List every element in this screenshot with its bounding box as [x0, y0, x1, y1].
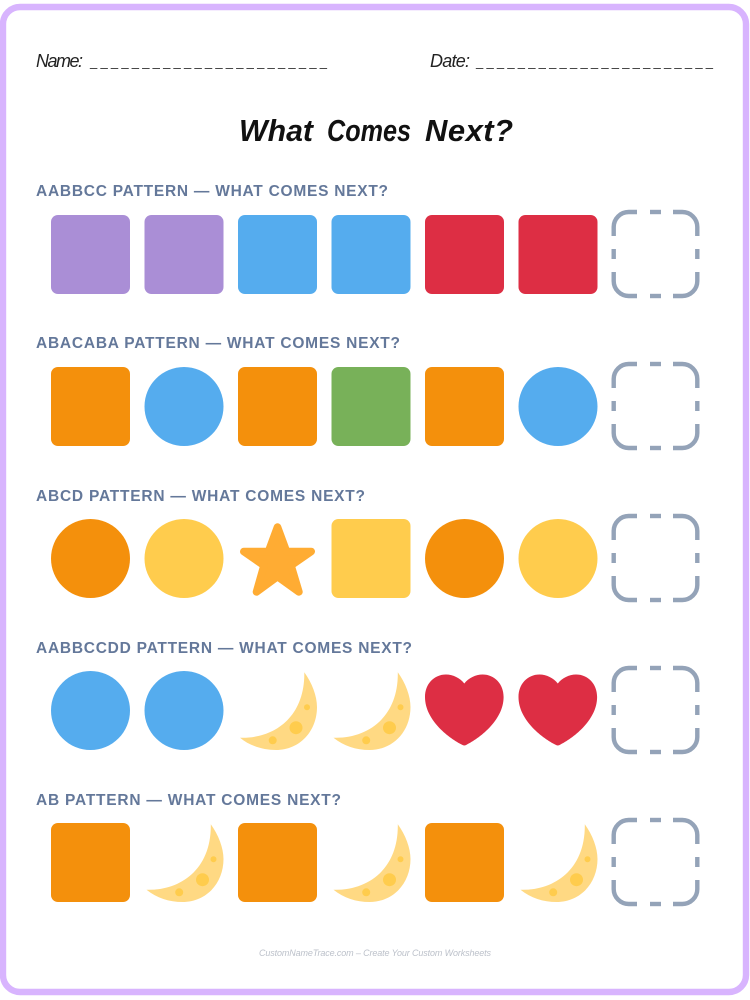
shape: crescent moon — [334, 824, 410, 902]
panel: AABBCC pattern — [36, 183, 697, 296]
title: What — [239, 113, 315, 148]
shape: blue circle — [144, 671, 224, 750]
title — [239, 113, 513, 148]
date field — [430, 51, 714, 71]
shape: orange square — [51, 367, 130, 446]
shape: blue square — [332, 215, 410, 294]
title: Comes — [327, 113, 411, 148]
answer box — [614, 364, 697, 448]
shape: orange circle — [425, 519, 504, 598]
shape: purple square — [144, 215, 224, 294]
shape: red square — [518, 215, 598, 294]
shape: blue circle — [144, 367, 224, 446]
date field: _______________________ — [475, 54, 714, 70]
panel: ABCD pattern — [36, 488, 697, 600]
shape: yellow square — [332, 519, 410, 598]
shape: red square — [425, 215, 504, 294]
answer box — [614, 212, 697, 296]
name field: _______________________ — [89, 54, 328, 70]
answer box — [614, 820, 697, 904]
title: Next? — [425, 113, 513, 148]
shape: orange square — [238, 823, 317, 902]
shape: crescent moon — [146, 824, 224, 902]
answer box — [614, 668, 697, 752]
panel: AB pattern — [36, 792, 697, 904]
heading: AABBCC PATTERN — WHAT COMES NEXT? — [36, 183, 388, 200]
shape: yellow circle — [144, 519, 224, 598]
shape: yellow circle — [518, 519, 598, 598]
shape: crescent moon — [334, 672, 410, 750]
shape: blue circle — [518, 367, 598, 446]
answer box — [614, 516, 697, 600]
shape: orange square — [238, 367, 317, 446]
shape: purple square — [51, 215, 130, 294]
date field: Date: — [430, 51, 470, 71]
shape: orange square — [425, 367, 504, 446]
heading: ABCD PATTERN — WHAT COMES NEXT? — [36, 488, 365, 505]
shape: crescent moon — [520, 824, 598, 902]
shape: red heart — [425, 674, 504, 746]
name field — [36, 51, 328, 71]
heading: ABACABA PATTERN — WHAT COMES NEXT? — [36, 335, 400, 352]
shape: blue square — [238, 215, 317, 294]
shape: crescent moon — [240, 672, 317, 750]
heading: AB PATTERN — WHAT COMES NEXT? — [36, 792, 341, 809]
panel: AABBCCDD pattern — [36, 640, 697, 752]
shape: orange square — [51, 823, 130, 902]
panel: ABACABA pattern — [36, 335, 697, 448]
shape: orange circle — [51, 519, 130, 598]
shape: blue circle — [51, 671, 130, 750]
shape: orange square — [425, 823, 504, 902]
footer: CustomNameTrace.com – Create Your Custom Worksheets — [259, 948, 492, 958]
shape: green square — [332, 367, 410, 446]
shape: red heart — [518, 674, 597, 746]
heading: AABBCCDD PATTERN — WHAT COMES NEXT? — [36, 640, 412, 657]
shape: orange star — [244, 527, 311, 592]
name field: Name: — [36, 51, 83, 71]
